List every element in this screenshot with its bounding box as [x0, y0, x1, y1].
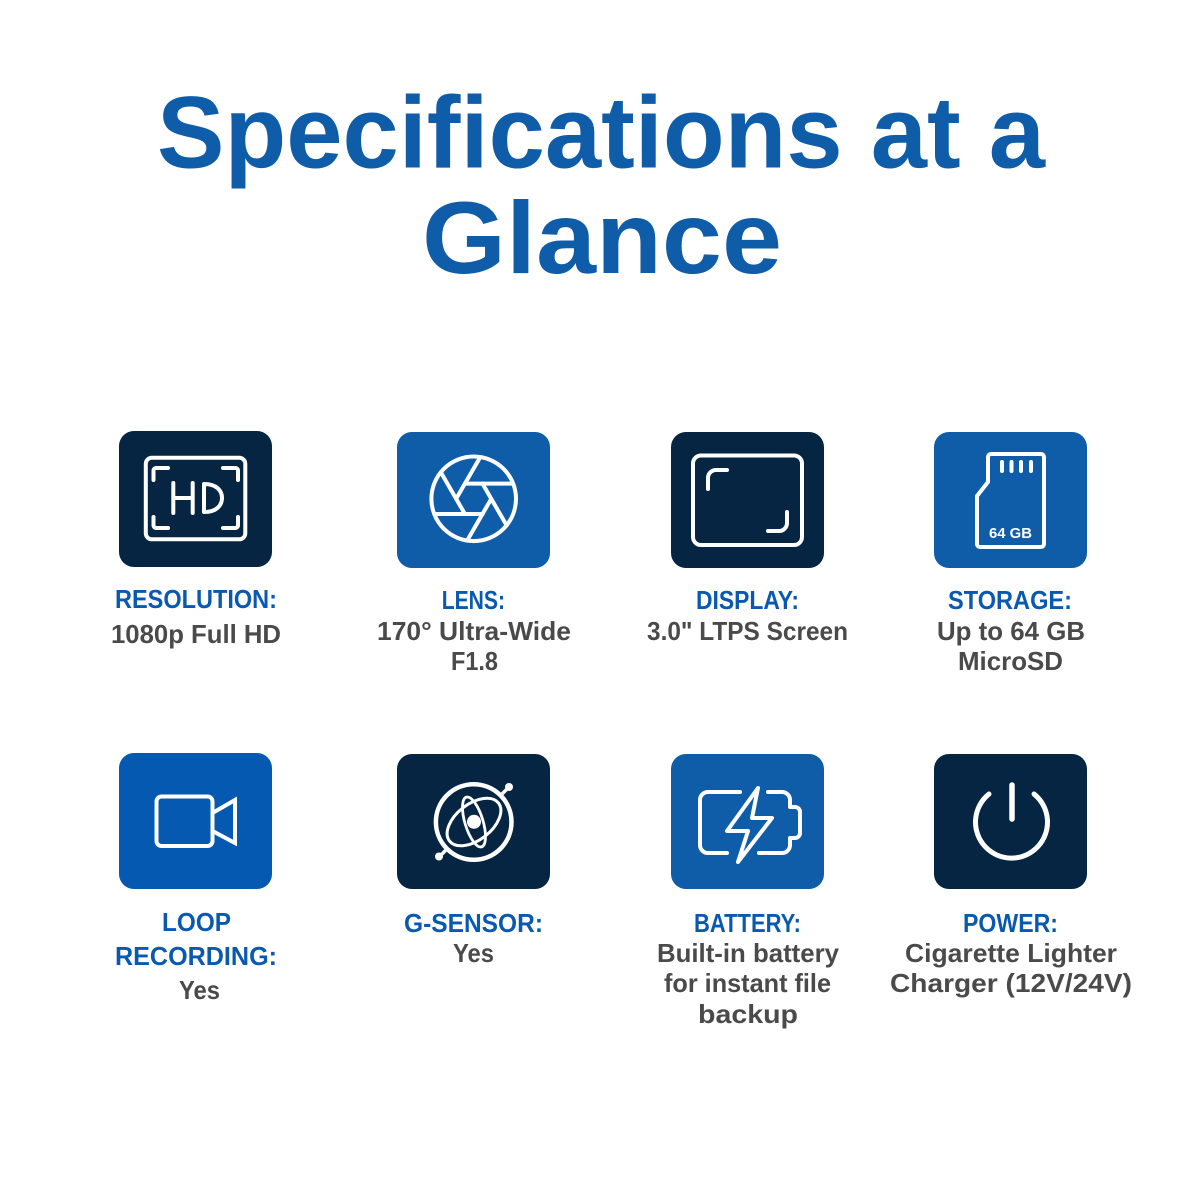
value: storage [937, 616, 1085, 676]
panel: resolution [111, 431, 281, 649]
value: storage: MicroSD [958, 646, 1063, 676]
value: power: Charger (12V/24V) [890, 968, 1132, 998]
value: lens: 170° Ultra-Wide [377, 616, 571, 646]
value: g-sensor: Yes [453, 938, 494, 968]
title [157, 76, 1046, 295]
value: resolution: 1080p Full HD [111, 619, 281, 649]
value: battery: backup [698, 999, 798, 1029]
icon: aperture [397, 432, 550, 568]
label: power: POWER: [963, 908, 1058, 938]
label: loop recording: LOOP [162, 907, 231, 937]
value: lens [377, 616, 571, 676]
value: battery [657, 938, 840, 1029]
icon: screen [671, 432, 824, 568]
label: loop recording: RECORDING: [115, 941, 277, 971]
value: display: 3.0" LTPS Screen [647, 616, 848, 646]
panel: power [890, 754, 1132, 998]
icon: video camera [119, 753, 272, 889]
panel: battery [657, 754, 840, 1029]
icon: microSD card: 64 GB [989, 526, 1032, 542]
panel: display [647, 432, 848, 646]
title: Glance [422, 181, 782, 295]
label: battery: BATTERY: [694, 908, 801, 938]
value: power [890, 938, 1132, 998]
icon: power button [934, 754, 1087, 889]
panel: loop recording [115, 753, 277, 1005]
label: storage: STORAGE: [948, 585, 1072, 615]
panel: lens [377, 432, 571, 676]
value: loop recording: Yes [179, 975, 220, 1005]
value: battery: Built-in battery [657, 938, 840, 968]
value: lens: F1.8 [451, 646, 498, 676]
icon: charging battery [671, 754, 824, 889]
icon: gyroscope [397, 754, 550, 889]
value: power: Cigarette Lighter [905, 938, 1117, 968]
label: resolution: RESOLUTION: [115, 584, 277, 614]
label: g-sensor: G-SENSOR: [404, 908, 543, 938]
label: loop recording [115, 907, 277, 971]
panel: storage [934, 432, 1087, 676]
value: storage: Up to 64 GB [937, 616, 1085, 646]
title: Specifications at a [157, 76, 1046, 190]
label: display: DISPLAY: [696, 585, 799, 615]
panel: g-sensor [397, 754, 550, 968]
icon: microSD card [934, 432, 1087, 568]
label: lens: LENS: [442, 585, 505, 615]
value: battery: for instant file [664, 968, 831, 998]
icon: HD [119, 431, 272, 567]
